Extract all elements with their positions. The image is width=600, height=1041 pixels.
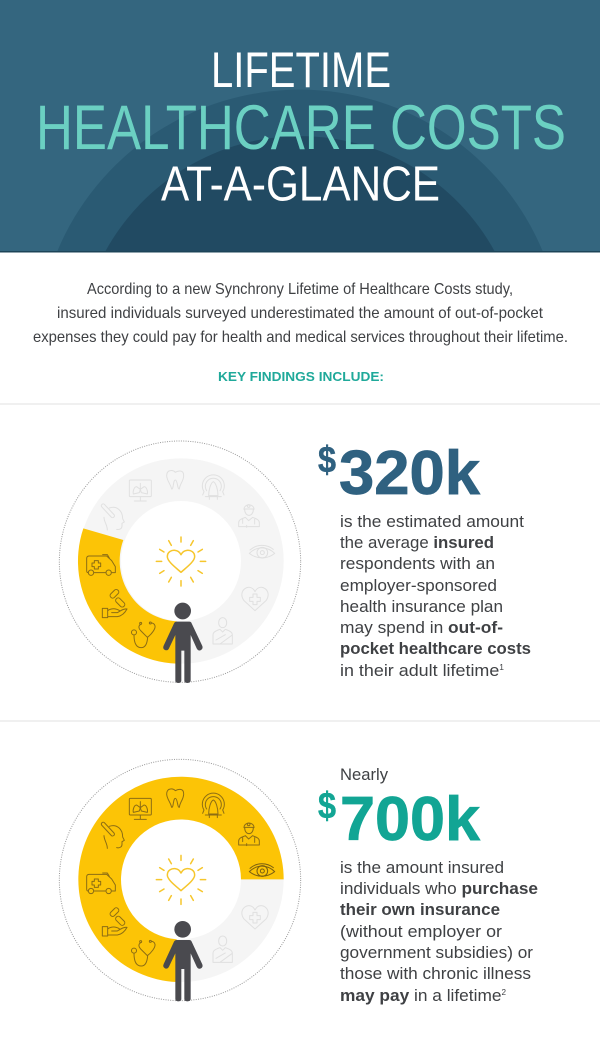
icon: patient with sling (213, 936, 232, 962)
finding: $320k: respondents with an (340, 554, 495, 573)
icon: tooth (167, 471, 184, 489)
finding: $700k (318, 765, 538, 1005)
finding: $320k: the average insured (340, 533, 494, 552)
finding: $320k: employer-sponsored (340, 576, 497, 595)
intro text: According to a new Synchrony Lifetime of Healthcare Costs study, (87, 281, 513, 298)
icon: stethoscope (131, 940, 155, 966)
icon: heart with cross (242, 906, 268, 929)
finding: $700k: may pay in a lifetime (340, 986, 500, 1005)
finding: $700k: those with chronic illness (340, 964, 531, 983)
finding: $700k: individuals who purchase (340, 879, 538, 898)
finding: $700k: 700k (340, 785, 481, 854)
finding: $320k: 320k (339, 439, 481, 508)
finding: $320k: $ (318, 439, 336, 480)
icon: hand with pills (102, 907, 127, 936)
icon: lungs on monitor (129, 480, 151, 501)
icon: ambulance (87, 873, 115, 894)
icon: heart with cross (242, 587, 268, 611)
icon: head with thermometer (101, 503, 124, 530)
key findings heading: KEY FINDINGS INCLUDE: (218, 370, 384, 384)
finding: $320k: 1 (499, 663, 505, 672)
icon: lungs on monitor (129, 798, 151, 819)
finding: $700k: government subsidies) or (340, 943, 533, 962)
person figure (163, 921, 203, 1001)
intro text (33, 281, 568, 346)
icon: stethoscope (131, 622, 155, 648)
finding: $320k (318, 439, 531, 680)
title (36, 42, 566, 212)
yellow share of ring (78, 777, 284, 982)
icon: MRI scanner (202, 793, 224, 818)
icon: heart with rays (156, 855, 206, 904)
yellow share of ring (78, 528, 177, 664)
header banner (0, 0, 600, 252)
icon: eye (249, 864, 275, 876)
title: LIFETIME (211, 42, 391, 98)
finding: $700k: their own insurance (340, 900, 500, 919)
finding: $700k: 2 (501, 988, 507, 997)
finding: $320k: health insurance plan (340, 597, 503, 616)
finding: $700k: is the amount insured (340, 858, 504, 877)
intro text: expenses they could pay for health and medical services throughout their lifetime. (33, 329, 568, 346)
icon: eye (249, 545, 275, 558)
icon: doctor (239, 823, 259, 846)
icon: patient with sling (213, 618, 232, 644)
icon: heart with rays (156, 537, 206, 586)
person figure (163, 603, 203, 683)
finding: $700k: $ (318, 785, 336, 826)
finding: $700k: (without employer or (340, 922, 502, 941)
icon: ambulance (87, 555, 115, 575)
icon: doctor (239, 505, 259, 527)
finding: $320k: in their adult lifetime (340, 661, 491, 680)
intro text: insured individuals surveyed underestimated the amount of out-of-pocket (57, 305, 544, 322)
title: AT-A-GLANCE (161, 158, 440, 212)
icon: tooth (167, 789, 184, 807)
finding: $700k: Nearly (340, 765, 388, 784)
ring chart: $320k (59, 441, 301, 683)
ring chart: $700k (59, 759, 301, 1001)
finding: $320k: may spend in out-of- (340, 618, 503, 637)
icon: head with thermometer (101, 822, 124, 848)
finding: $320k: is the estimated amount (340, 512, 524, 531)
icon: hand with pills (102, 588, 127, 618)
finding: $320k: pocket healthcare costs (340, 639, 531, 658)
icon: MRI scanner (202, 475, 224, 499)
